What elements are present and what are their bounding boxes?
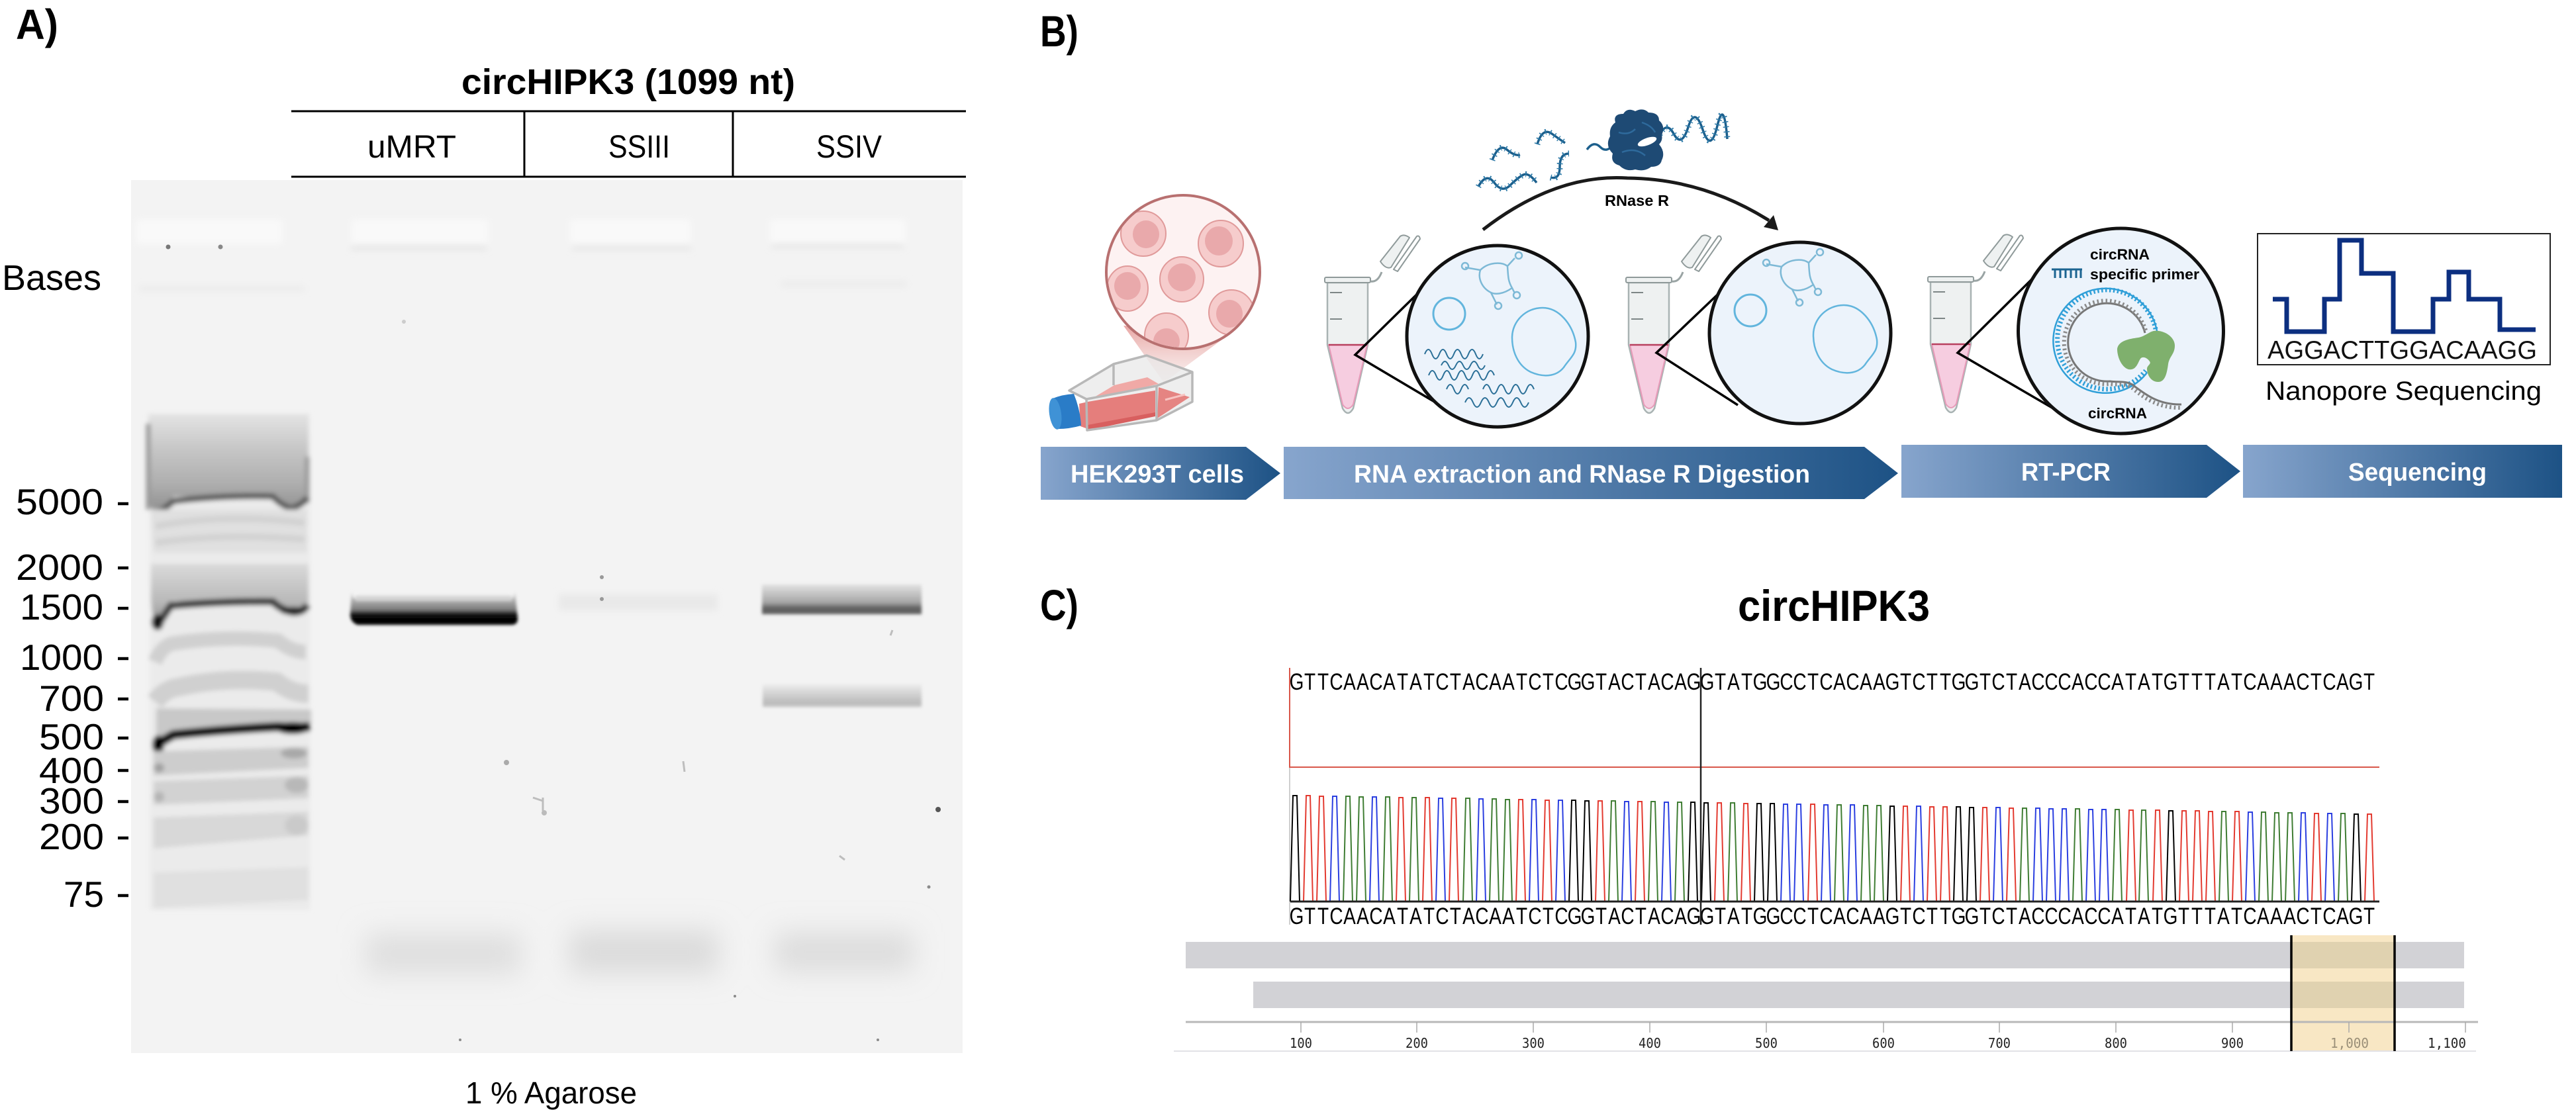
step arrow: RT-PCR bbox=[1901, 445, 2240, 498]
ladder size labels: 700 bbox=[39, 678, 104, 719]
ladder size labels: 5000 bbox=[16, 481, 103, 522]
axis labels: 900 bbox=[2221, 1035, 2244, 1051]
read bar 1 bbox=[1186, 942, 2464, 968]
icon: RNase R with RNA fragments bbox=[1478, 109, 1727, 189]
ladder size labels: 1000 bbox=[20, 637, 103, 678]
icon: flask with cell zoom bbox=[1047, 195, 1260, 430]
header table lines bbox=[291, 111, 966, 177]
band SSIII bbox=[559, 594, 718, 610]
panel label A: A) bbox=[16, 1, 58, 48]
axis labels: 800 bbox=[2105, 1035, 2127, 1051]
ladder size labels: 2000 bbox=[16, 547, 103, 588]
ladder size labels: 200 bbox=[39, 816, 104, 857]
ladder size labels: 400 bbox=[39, 750, 104, 791]
axis labels bbox=[1290, 1035, 2466, 1051]
panel label B: B) bbox=[1040, 7, 1078, 56]
highlight borders bbox=[2291, 935, 2395, 1051]
gel image bbox=[131, 180, 963, 1053]
axis labels: 200 bbox=[1406, 1035, 1428, 1051]
label: circRNA specific primer: specific primer bbox=[2090, 266, 2199, 283]
lane label SSIV: SSIV bbox=[816, 130, 882, 165]
read bar 2 bbox=[1253, 982, 2464, 1008]
gel title: circHIPK3 (1099 nt) bbox=[461, 62, 795, 102]
ladder size labels: 300 bbox=[39, 780, 104, 821]
step arrow: RNA extraction and RNase R Digestion bbox=[1284, 447, 1898, 499]
axis labels: 500 bbox=[1755, 1035, 1778, 1051]
step arrow: RT-PCR: RT-PCR bbox=[2021, 459, 2111, 486]
step arrow: HEK293T cells: HEK293T cells bbox=[1071, 461, 1244, 488]
panel C title: circHIPK3 bbox=[1738, 581, 1930, 630]
ladder size labels bbox=[16, 481, 128, 915]
circular strands bbox=[2053, 289, 2181, 408]
arrow: RNase R digestion bbox=[1483, 177, 1778, 230]
panel A: gel header bbox=[291, 62, 966, 177]
step arrow: RNA extraction and RNase R Digestion: RNA extraction and RNase R Digestion bbox=[1354, 461, 1810, 488]
lane label SSIII: SSIII bbox=[608, 130, 670, 165]
ladder lane bbox=[147, 414, 311, 910]
smears bbox=[365, 930, 914, 974]
gel caption: 1 % Agarose bbox=[465, 1076, 637, 1110]
peaks T bbox=[1304, 796, 2374, 902]
label: RNase R: RNase R bbox=[1605, 192, 1669, 209]
zoom lens 1: total RNA bbox=[1355, 246, 1588, 427]
band SSIV lower bbox=[763, 684, 922, 707]
highlight region bbox=[2291, 935, 2395, 1051]
ladder size labels: 75 bbox=[64, 874, 104, 915]
zoom lens 2: circular RNA after digestion bbox=[1656, 242, 1891, 424]
step bar: Sequencing: Sequencing bbox=[2348, 459, 2487, 486]
trace baseline bbox=[1290, 900, 2379, 903]
icon: reverse transcriptase bbox=[2117, 331, 2175, 382]
coverage map bbox=[1174, 935, 2478, 1051]
axis labels: 600 bbox=[1872, 1035, 1895, 1051]
tube 2 bbox=[1626, 235, 1721, 413]
tube 1 bbox=[1325, 235, 1420, 413]
wells bbox=[136, 220, 907, 291]
icon: primer bbox=[2052, 269, 2082, 278]
axis labels: 700 bbox=[1988, 1035, 2011, 1051]
axis bbox=[1186, 1021, 2478, 1023]
called sequence: GTTCAACATATCTACAATCTCGGTACTACAGGTATGGCCTCACAAGTCTTGGTCTACCCACCATATGTTTATCAAACTCAGT bbox=[1290, 903, 2375, 929]
ladder size labels: 1500 bbox=[20, 586, 103, 627]
axis labels: 100 bbox=[1290, 1035, 1312, 1051]
peaks A bbox=[1343, 796, 2348, 902]
panel C: chromatogram bbox=[1290, 668, 2379, 929]
ladder size labels: 500 bbox=[39, 716, 104, 757]
panel label C: C) bbox=[1040, 580, 1078, 629]
axis labels: 1,000 bbox=[2330, 1035, 2369, 1051]
axis labels: 300 bbox=[1522, 1035, 1545, 1051]
label: Nanopore Sequencing: Nanopore Sequencing bbox=[2266, 377, 2542, 406]
band SSIV upper bbox=[762, 584, 922, 614]
junction marker bbox=[1700, 668, 1701, 925]
step arrow: HEK293T cells bbox=[1041, 447, 1280, 500]
peaks G bbox=[1290, 796, 2361, 902]
lane label uMRT: uMRT bbox=[367, 130, 456, 165]
label: circRNA specific primer: circRNA bbox=[2090, 246, 2150, 263]
sequencing trace box bbox=[2258, 234, 2550, 365]
label: circRNA specific primer bbox=[2090, 246, 2199, 283]
tube 3 bbox=[1928, 234, 2023, 412]
reference sequence: GTTCAACATATCTACAATCTCGGTACTACAGGTATGGCCTCACAAGTCTTGGTCTACCCACCATATGTTTATCAAACTCAGT bbox=[1290, 669, 2375, 695]
axis label: Bases: Bases bbox=[2, 258, 101, 298]
band uMRT bbox=[350, 592, 518, 625]
axis labels: 1,100 bbox=[2428, 1035, 2466, 1051]
step bar: Sequencing bbox=[2243, 445, 2562, 498]
peaks C bbox=[1330, 796, 2334, 902]
highlight overlap bbox=[2291, 942, 2395, 1008]
zoom lens 3: RT of circRNA bbox=[1958, 228, 2223, 434]
specks bbox=[166, 245, 941, 1041]
quality line bbox=[1290, 668, 2379, 767]
label: circRNA: circRNA bbox=[2088, 405, 2147, 422]
sequencing trace box: AGGACTTGGACAAGG bbox=[2267, 336, 2537, 365]
axis labels: 400 bbox=[1639, 1035, 1661, 1051]
